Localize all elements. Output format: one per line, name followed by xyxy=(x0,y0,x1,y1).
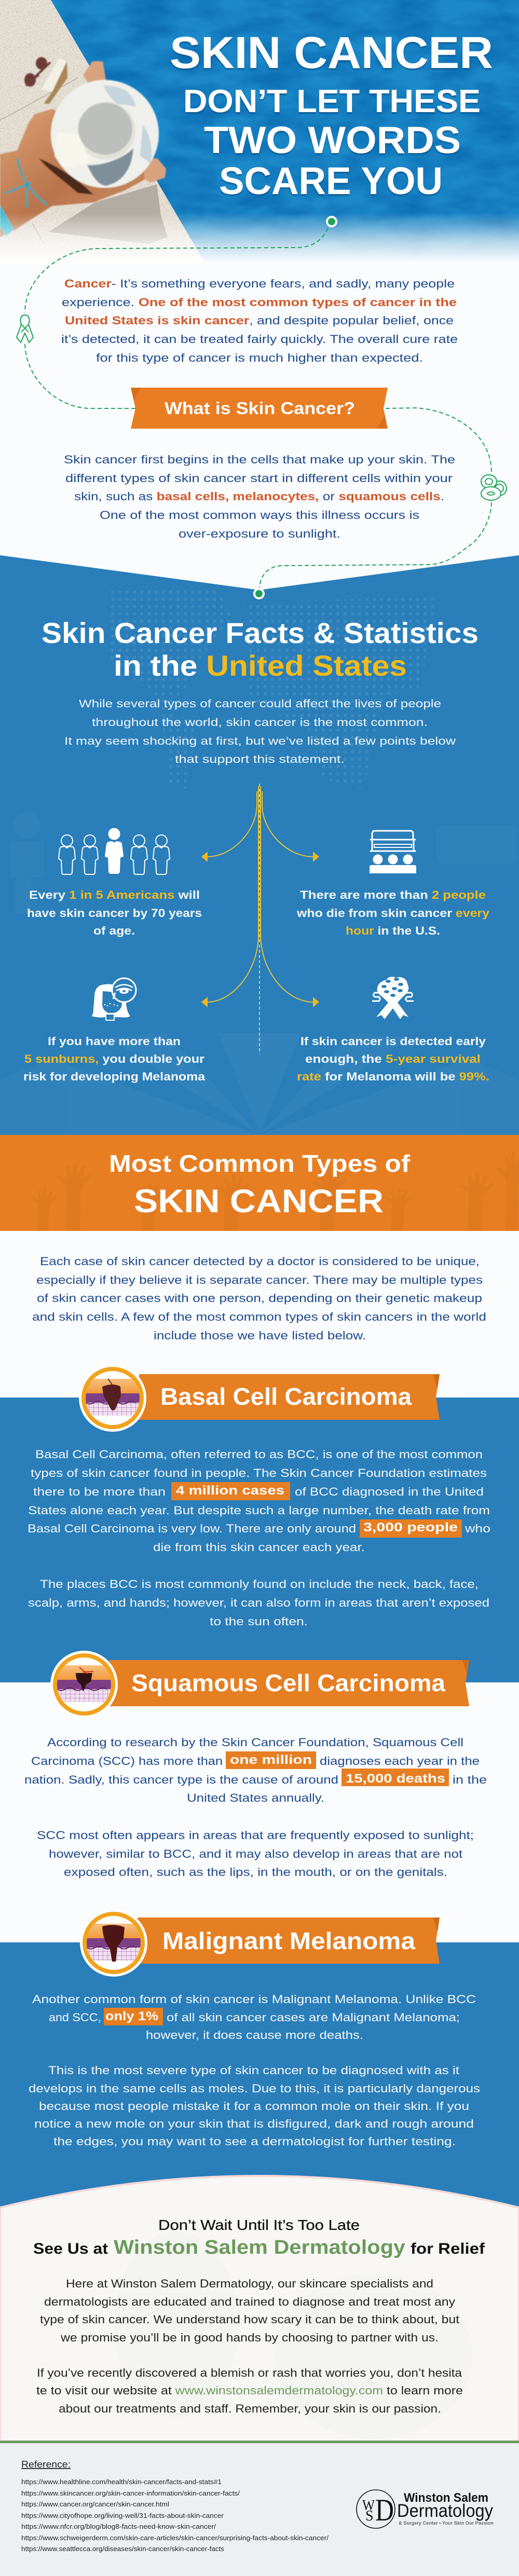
squamous text xyxy=(24,1736,487,1879)
title: SKIN CANCER xyxy=(170,28,493,78)
facts heading xyxy=(42,616,479,682)
references: https://www.skincancer.org/skin-cancer-information/skin-cancer-facts/ xyxy=(21,2489,240,2497)
water background xyxy=(0,0,519,264)
melanoma badge xyxy=(80,1909,147,1977)
types intro text: include those we have listed below. xyxy=(154,1329,366,1342)
what is skin cancer text: different types of skin cancer start in different cells within your xyxy=(65,472,453,485)
sunscreen bottle xyxy=(42,59,67,92)
logo xyxy=(357,2490,494,2528)
panel: most common types header: SKIN CANCER xyxy=(134,1183,384,1220)
types intro text xyxy=(32,1255,486,1342)
logo: Winston Salem xyxy=(404,2491,488,2505)
fact: survival rate: rate for Melanoma will be 99%. xyxy=(297,1070,489,1083)
types intro text: Each case of skin cancer detected by a doctor is considered to be unique, xyxy=(40,1255,480,1268)
panel: footer xyxy=(0,2441,519,2576)
basal ribbon xyxy=(139,1374,440,1420)
what is skin cancer text: skin, such as basal cells, melanocytes, or squamous cells . xyxy=(74,490,444,503)
squamous text: According to research by the Skin Cancer Foundation, Squamous Cell xyxy=(47,1736,463,1749)
icon: skin cells xyxy=(481,475,507,500)
melanoma ribbon: Malignant Melanoma xyxy=(162,1927,415,1954)
fact: one in five xyxy=(27,888,202,937)
facts intro: that support this statement. xyxy=(175,753,345,765)
highlight: 3,000 people: 3,000 people xyxy=(363,1520,458,1534)
facts intro xyxy=(64,698,456,765)
fact: survival rate xyxy=(297,1035,489,1083)
arch background xyxy=(0,2176,519,2443)
icon: ribbon of cells xyxy=(372,977,414,1019)
fact: one in five: of age. xyxy=(93,924,135,937)
types intro text: especially if they believe it is separate cancer. There may be multiple types xyxy=(36,1273,483,1286)
squamous text: United States annually. xyxy=(187,1791,324,1804)
squamous badge xyxy=(50,1651,118,1718)
connector end dot xyxy=(253,588,265,599)
fact: two people per hour: There are more than 2 people xyxy=(300,888,486,901)
title xyxy=(170,28,493,202)
highlight: 4 million cases xyxy=(171,1482,290,1500)
fact: sunburns: 5 sunburns, you double your xyxy=(24,1052,204,1065)
fact: one in five: Every 1 in 5 Americans will xyxy=(29,888,200,901)
pool deck xyxy=(0,0,208,264)
panel: squamous cell carcinoma xyxy=(24,1651,487,1879)
melanoma text: develops in the same cells as moles. Due to this, it is particularly dangerous xyxy=(29,2082,480,2095)
bottom fade xyxy=(0,213,519,264)
hands xyxy=(83,61,166,183)
icon: face with magnifier xyxy=(91,978,136,1020)
what is skin cancer text: Skin cancer first begins in the cells that make up your skin. The xyxy=(64,453,455,466)
heading: Most Common Types of xyxy=(109,1150,411,1177)
intro text: Cancer - It’s something everyone fears, and sadly, many people xyxy=(64,277,455,290)
highlight: 3,000 people xyxy=(360,1519,462,1538)
what is skin cancer text: One of the most common ways this illness occurs is xyxy=(100,509,419,522)
basal text: of BCC diagnosed in the United xyxy=(295,1485,484,1498)
world map dots xyxy=(106,589,436,789)
references: Reference: xyxy=(21,2459,71,2470)
arrows: branching lines xyxy=(201,784,319,1054)
fact: sunburns: risk for developing Melanoma xyxy=(23,1070,206,1083)
blue background xyxy=(0,555,519,1135)
hat brim xyxy=(51,80,159,188)
squamous text: Carcinoma (SCC) has more than xyxy=(31,1755,223,1767)
highlight: only 1%: only 1% xyxy=(105,2009,158,2023)
what is skin cancer text xyxy=(64,453,455,540)
fact: two people per hour: who die from skin cancer every xyxy=(296,907,490,920)
facts heading: Skin Cancer Facts & Statistics xyxy=(42,616,479,649)
panel: call to action xyxy=(0,2176,519,2443)
highlight: one million xyxy=(226,1751,316,1769)
melanoma text: because most people mistake it for a common mole on their skin. If you xyxy=(39,2100,469,2113)
basal text xyxy=(28,1448,490,1628)
arrow heads xyxy=(201,852,319,1007)
hero panel xyxy=(0,0,519,264)
facts heading: in the United States xyxy=(114,649,407,682)
cta text: we promise you’ll be in good hands by choosing to partner with us. xyxy=(60,2331,439,2344)
types intro text: and skin cells. A few of the most common types of skin cancers in the world xyxy=(32,1310,486,1323)
title: TWO WORDS xyxy=(204,119,461,161)
faded watermark icons xyxy=(10,812,516,913)
melanoma text: of all skin cancer cases are Malignant Melanoma; xyxy=(167,2011,460,2024)
title: SCARE YOU xyxy=(219,159,443,202)
highlight: one million: one million xyxy=(230,1753,312,1767)
logo: W xyxy=(362,2497,375,2514)
bikini xyxy=(5,158,47,208)
sunglasses xyxy=(25,62,50,86)
logo: D xyxy=(375,2493,394,2527)
melanoma text: however, it does cause more deaths. xyxy=(146,2029,363,2041)
types intro text: of skin cancer cases with one person, depending on their genetic makeup xyxy=(37,1292,482,1305)
squamous text: however, similar to BCC, and it may also develop in areas that are not xyxy=(49,1847,462,1860)
rays xyxy=(0,1033,519,1135)
what is skin cancer text: over-exposure to sunlight. xyxy=(179,527,340,540)
hat crown xyxy=(77,102,135,160)
highlight: only 1% xyxy=(104,2008,163,2025)
woman in sun hat xyxy=(0,57,166,237)
melanoma text: Another common form of skin cancer is Malignant Melanoma. Unlike BCC xyxy=(32,1993,476,2006)
fact: one in five: have skin cancer by 70 years xyxy=(27,907,202,920)
highlight: 4 million cases: 4 million cases xyxy=(176,1484,284,1498)
connector start dot xyxy=(326,216,337,227)
squamous ribbon: Squamous Cell Carcinoma xyxy=(131,1669,445,1696)
intro text: it’s detected, it can be treated fairly quickly. The overall cure rate xyxy=(61,333,458,346)
cta heading: for Relief xyxy=(411,2240,485,2257)
cta heading: Don’t Wait Until It’s Too Late xyxy=(158,2217,360,2233)
basal text: who xyxy=(465,1522,490,1535)
cta text: If you’ve recently discovered a blemish or rash that worries you, don’t hesita xyxy=(37,2366,462,2379)
facts intro: It may seem shocking at first, but we’ve listed a few points below xyxy=(64,735,456,747)
dashed connector: top xyxy=(25,228,491,587)
squamous text: exposed often, such as the lips, in the mouth, or on the genitals. xyxy=(64,1866,447,1879)
basal text: States alone each year. But despite such a large number, the death rate from xyxy=(28,1504,490,1517)
melanoma text: notice a new mole on your skin that is disfigured, dark and rough around xyxy=(34,2117,474,2130)
hat shadow xyxy=(87,148,133,186)
icon: five people xyxy=(59,828,170,874)
basal text: scalp, arms, and hands; however, it can also form in areas that aren’t exposed xyxy=(28,1596,489,1609)
melanoma text: and SCC, xyxy=(49,2011,101,2024)
basal text: to the sun often. xyxy=(210,1615,308,1628)
melanoma ribbon xyxy=(138,1917,440,1964)
cta text: te to visit our website at www.winstonsalemdermatology.com to learn more xyxy=(36,2384,463,2397)
intro text xyxy=(61,277,458,364)
squamous text: nation. Sadly, this cancer type is the cause of around xyxy=(24,1773,338,1786)
cta text: type of skin cancer. We understand how scary it can be to think about, but xyxy=(40,2313,459,2326)
basal text: there to be more than xyxy=(33,1485,166,1498)
logo: S xyxy=(365,2508,374,2524)
intro text: United States is skin cancer , and despite popular belief, once xyxy=(65,314,454,327)
fact: survival rate: If skin cancer is detected early xyxy=(301,1035,486,1048)
intro text: experience. One of the most common types of cancer in the xyxy=(62,296,457,309)
references: https://www.cancer.org/cancer/skin-cancer.html xyxy=(21,2500,169,2508)
panel: malignant melanoma xyxy=(0,1909,519,2217)
icon: casket and mourners xyxy=(370,831,416,873)
logo: Dermatology xyxy=(397,2501,493,2521)
facts intro: While several types of cancer could affect the lives of people xyxy=(79,698,441,710)
basal text: die from this skin cancer each year. xyxy=(153,1541,365,1554)
squamous text: in the xyxy=(453,1773,487,1786)
panel: most common types header xyxy=(0,1135,519,1231)
squamous text: SCC most often appears in areas that are frequently exposed to sunlight; xyxy=(37,1829,474,1842)
cta text: Here at Winston Salem Dermatology, our skincare specialists and xyxy=(66,2277,433,2290)
cta heading xyxy=(33,2217,485,2258)
basal text: Basal Cell Carcinoma, often referred to as BCC, is one of the most common xyxy=(35,1448,483,1461)
logo: & Surgery Center • Your Skin Our Passion xyxy=(399,2520,494,2526)
highlight: 15,000 deaths: 15,000 deaths xyxy=(346,1772,445,1786)
references: https://www.seattlecca.org/diseases/skin-cancer/skin-cancer-facts xyxy=(21,2545,225,2553)
cta text: about our treatments and staff. Remember, your skin is our passion. xyxy=(59,2402,441,2415)
melanoma text xyxy=(29,1993,480,2148)
faded people watermark xyxy=(114,2231,472,2439)
fact: sunburns: If you have more than xyxy=(48,1035,181,1048)
references: https://www.healthline.com/health/skin-cancer/facts-and-stats#1 xyxy=(21,2478,222,2486)
references: https://www.schweigerderm.com/skin-care-articles/skin-cancer/surprising-facts-about-skin-cancer/ xyxy=(21,2534,329,2542)
cta heading: Winston Salem Dermatology xyxy=(114,2237,405,2258)
fact: survival rate: enough, the 5-year survival xyxy=(305,1052,481,1065)
intro text: for this type of cancer is much higher than expected. xyxy=(96,351,423,364)
facts intro: throughout the world, skin cancer is the most common. xyxy=(92,717,428,729)
references: https://www.cityofhope.org/living-well/31-facts-about-skin-cancer xyxy=(21,2512,224,2519)
basal badge xyxy=(79,1364,146,1432)
raised hands xyxy=(31,1152,519,1231)
basal text: types of skin cancer found in people. The Skin Cancer Foundation estimates xyxy=(31,1467,487,1479)
banner: what is skin cancer: What is Skin Cancer? xyxy=(165,399,355,418)
panel: basal cell carcinoma xyxy=(0,1364,519,1682)
melanoma text: This is the most severe type of skin cancer to be diagnosed with as it xyxy=(48,2064,459,2077)
banner: what is skin cancer xyxy=(131,388,388,429)
icon: awareness ribbon xyxy=(17,315,33,342)
fact: sunburns xyxy=(23,1035,206,1083)
title: DON’T LET THESE xyxy=(183,84,481,119)
cta heading: See Us at xyxy=(33,2240,108,2257)
cta text: dermatologists are educated and trained to diagnose and treat most any xyxy=(44,2295,455,2308)
basal text: Basal Cell Carcinoma is very low. There are only around xyxy=(28,1522,356,1535)
squamous ribbon xyxy=(109,1660,469,1706)
references: https://www.nfcr.org/blog/blog8-facts-need-know-skin-cancer/ xyxy=(21,2523,216,2530)
panel: facts and statistics xyxy=(0,555,519,1135)
cta text xyxy=(36,2277,463,2415)
melanoma text: the edges, you may want to see a dermatologist for further testing. xyxy=(53,2135,456,2148)
squamous text: diagnoses each year in the xyxy=(320,1755,480,1767)
hat bow xyxy=(54,132,91,167)
fact: two people per hour: hour in the U.S. xyxy=(346,924,440,937)
references xyxy=(21,2459,329,2553)
fact: two people per hour xyxy=(296,888,490,937)
woman's back and arms xyxy=(0,109,151,237)
basal ribbon: Basal Cell Carcinoma xyxy=(160,1383,412,1410)
highlight: 15,000 deaths xyxy=(342,1769,449,1786)
basal text: The places BCC is most commonly found on include the neck, back, face, xyxy=(40,1578,479,1591)
